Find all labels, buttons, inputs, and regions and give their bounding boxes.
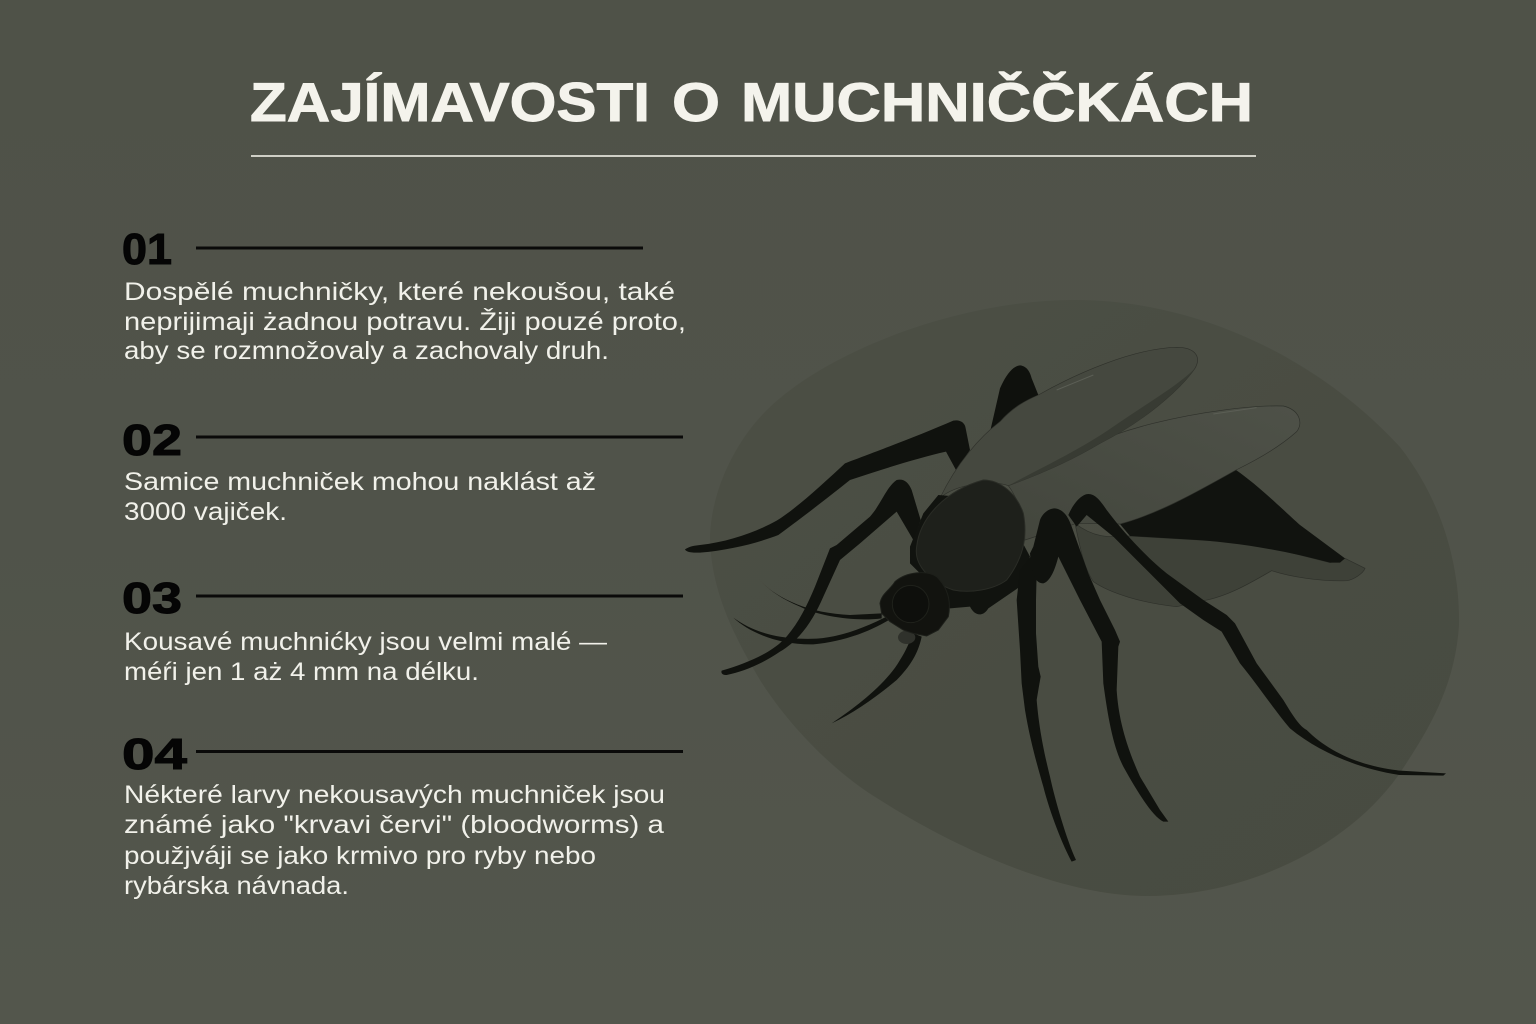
number 03: 03 xyxy=(122,574,182,623)
rear wing xyxy=(1008,406,1300,540)
fact 03 text xyxy=(124,628,607,686)
antennae and palp xyxy=(733,578,922,723)
abdomen lower xyxy=(1075,523,1365,607)
title: ZAJÍMAVOSTI xyxy=(250,71,650,133)
abdomen dark xyxy=(1120,470,1345,563)
head xyxy=(880,573,949,644)
fact 04 text: použjváji se jako krmivo pro ryby nebo xyxy=(124,842,596,870)
thorax xyxy=(916,480,1025,591)
middle leg inner xyxy=(1017,553,1076,862)
front wing xyxy=(940,347,1198,498)
long legs xyxy=(1017,494,1446,862)
fact 02 xyxy=(122,416,683,526)
fact 01 text xyxy=(124,278,686,365)
head-side legs, antennae and body xyxy=(721,480,1030,723)
fact 03 text: Kousavé muchnićky jsou velmi malé — xyxy=(124,628,607,656)
fact 01 text: aby se rozmnožovaly a zachovaly druh. xyxy=(124,337,609,365)
middle leg outer xyxy=(1030,508,1168,822)
backdrop blob xyxy=(710,300,1459,896)
fact 04 text: Nékteré larvy nekousavých muchniček jsou xyxy=(124,781,665,809)
number 04: 04 xyxy=(122,730,188,779)
fact 02 text: 3000 vajiček. xyxy=(124,498,287,526)
fact 04 text: známé jako "krvavi červi" (bloodworms) a xyxy=(124,811,664,839)
lower front leg xyxy=(721,480,921,675)
fact 01 text: Dospělé muchničky, které nekoušou, také xyxy=(124,278,675,306)
fact 04 text: rybárska návnada. xyxy=(124,872,349,900)
wing highlights xyxy=(1057,375,1257,414)
hind leg xyxy=(1068,494,1446,776)
thorax underside xyxy=(910,495,1030,614)
title xyxy=(250,71,1253,133)
fact 04 text xyxy=(124,781,665,900)
title: MUCHNIČČKÁCH xyxy=(741,71,1253,133)
number 02: 02 xyxy=(122,416,182,465)
front wing shade xyxy=(1008,368,1195,486)
fact 02 text xyxy=(124,468,596,526)
rear body and wings xyxy=(940,347,1365,607)
illustration: mosquito on round backdrop xyxy=(685,300,1459,896)
upper front leg xyxy=(685,420,970,553)
fact 04 xyxy=(122,730,683,900)
title: O xyxy=(672,71,720,133)
fact 03 xyxy=(122,574,683,686)
fact 02 text: Samice muchniček mohou naklást až xyxy=(124,468,596,496)
number 01: 01 xyxy=(122,225,172,274)
fact 01 xyxy=(122,225,686,365)
fact 03 text: méŕi jen 1 aż 4 mm na délku. xyxy=(124,658,479,686)
far wing stub xyxy=(990,365,1038,432)
fact 01 text: neprijimaji żadnou potravu. Žiji pouzé proto, xyxy=(124,307,686,336)
